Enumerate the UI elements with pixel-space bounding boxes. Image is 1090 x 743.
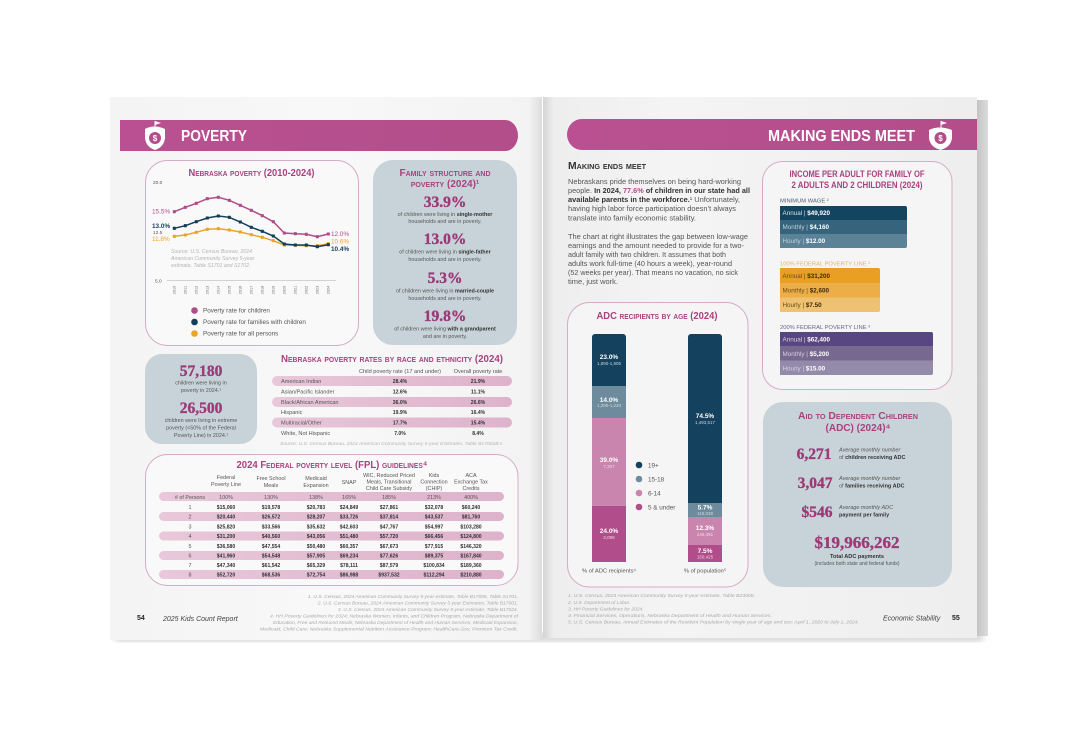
page number 54: 54 <box>137 615 145 622</box>
stat: married couple: of children were living in married-couple <box>396 288 494 294</box>
stat: payment per family <box>802 504 893 521</box>
data rows: $87,579 <box>380 563 398 569</box>
table rows <box>281 379 486 437</box>
column headers: Free School <box>256 476 286 482</box>
percent row: 130% <box>264 495 278 501</box>
table rows: 8.4% <box>472 431 484 437</box>
body text: time, just work. <box>568 277 618 286</box>
body text: adults work full-time (40 hours a week), year-round <box>568 259 732 268</box>
table column headers: Child poverty rate (17 and under) <box>359 369 441 375</box>
panel heading <box>790 169 925 191</box>
data rows: $112,294 <box>424 572 445 578</box>
minimum wage block: Hourly | $12.00 <box>782 238 826 245</box>
header title: POVERTY <box>181 128 247 145</box>
data rows: $68,536 <box>262 572 280 578</box>
data rows: $28,207 <box>307 514 325 520</box>
percent row: # of Persons <box>175 495 205 501</box>
data rows: $24,849 <box>340 505 358 511</box>
data rows: $60,240 <box>462 505 480 511</box>
200% federal poverty line block: 200% FEDERAL POVERTY LINE ³ <box>780 325 870 331</box>
column headers: Meals <box>264 483 278 489</box>
stat: married couple: households and are in poverty. <box>408 296 482 302</box>
data rows: $26,572 <box>262 514 280 520</box>
line: all persons <box>173 227 330 247</box>
data rows: $77,915 <box>425 544 443 550</box>
panel heading: 2 ADULTS AND 2 CHILDREN (2024) <box>792 180 922 191</box>
column headers: WIC, Reduced Priced <box>363 473 415 479</box>
data rows: $146,320 <box>460 544 482 550</box>
header bar: poverty <box>120 120 518 151</box>
x axis years: 2015 <box>228 286 232 294</box>
data rows: 5 <box>188 544 192 550</box>
right page footnotes: 2. U.S. Department of Labor. <box>567 600 630 606</box>
stat: single father: of children were living in single-father <box>399 250 492 256</box>
table source: Source: U.S. Census Bureau, 2024 American Community Survey 5-year Estimates, Table B17001B-I. <box>280 441 503 446</box>
table title: 2024 Federal poverty level (FPL) guidelines⁴ <box>236 460 428 471</box>
stat: children receiving: Average monthly number <box>838 448 902 454</box>
table rows: 26.6% <box>471 400 486 406</box>
table rows: 17.7% <box>393 420 408 426</box>
data rows: 6 <box>188 554 192 560</box>
100% federal poverty line block: Monthly | $2,600 <box>782 288 829 294</box>
body text: Nebraskans pride themselves on being hard-working <box>568 177 741 186</box>
section name: Economic Stability <box>883 616 941 622</box>
panel: poverty line chart <box>146 160 358 346</box>
stat: grandparent <box>394 308 496 340</box>
stat: single mother: households and are in poverty. <box>408 219 482 225</box>
left page footnotes <box>260 594 519 632</box>
table rows: Black/African American <box>281 400 339 406</box>
stat: grandparent: of children were living with a grandparent <box>394 326 496 332</box>
table rows: White, Not Hispanic <box>281 431 330 437</box>
stacked bar: population: 74.5% <box>696 413 714 420</box>
data rows: $41,960 <box>217 554 235 560</box>
table rows: American Indian <box>281 379 321 385</box>
stacked bar: population: 12.3% <box>696 525 714 532</box>
data rows: $20,440 <box>217 514 235 520</box>
percent row: 100% <box>219 495 233 501</box>
stacked bar: ADC recipients: 39.0% <box>600 457 618 464</box>
stat: 26,500: 26,500 <box>180 400 223 417</box>
data rows: $40,560 <box>262 534 280 540</box>
left page footnotes: Medicaid, Child Care; Nebraska Supplemental Nutrition Assistance Program; HealthCare.Gov, Premium Tax Credit. <box>260 626 518 632</box>
data rows: $72,754 <box>307 572 325 578</box>
data rows: $52,720 <box>217 572 235 578</box>
column headers: Kids <box>429 473 440 479</box>
stat: 26,500 <box>165 400 237 439</box>
data rows: $57,720 <box>380 534 398 540</box>
stat: 26,500: children were living in extreme <box>165 418 237 424</box>
axis labels: 12.5 <box>153 230 163 236</box>
data rows: $33,566 <box>262 524 280 530</box>
data rows: $89,375 <box>425 554 443 560</box>
data rows: 2 <box>188 514 192 520</box>
right page footnotes: 1. U.S. Census, 2024 American Community Survey 5-year estimate, Table B23008. <box>568 593 755 599</box>
column headers: Credits <box>462 486 480 492</box>
x axis years: 2014 <box>216 286 220 294</box>
stacked bar: population: 115,038 <box>697 511 713 516</box>
body text: people. In 2024, 77.6% of children in our state had all <box>568 186 750 195</box>
chart title: Nebraska poverty (2010-2024) <box>188 168 314 179</box>
stat: 26,500: Poverty Line) in 2024.¹ <box>174 433 228 439</box>
legend: Poverty rate for children <box>203 308 270 314</box>
data rows: 3 <box>188 524 192 530</box>
stat: payment per family: payment per family <box>839 512 890 518</box>
minimum wage block <box>780 198 907 248</box>
200% federal poverty line block: Hourly | $15.00 <box>782 366 826 372</box>
column headers: Connection <box>420 480 448 486</box>
stat: families receiving: 3,047 <box>798 475 833 492</box>
stat: total payments: $19,966,262 <box>814 533 900 552</box>
data rows: $78,111 <box>340 563 358 569</box>
stacked bar: ADC recipients: 1,890-1,905 <box>597 361 622 366</box>
stat: families receiving <box>798 475 905 492</box>
data rows: $60,357 <box>340 544 358 550</box>
data rows: $20,783 <box>307 505 325 511</box>
panel heading: Family structure and <box>400 168 490 179</box>
book shadow <box>115 632 983 642</box>
percent row <box>175 495 478 501</box>
200% federal poverty line block: Monthly | $5,200 <box>782 351 829 358</box>
data rows: $103,280 <box>460 524 482 530</box>
data rows: $66,456 <box>425 534 443 540</box>
100% federal poverty line block: 100% FEDERAL POVERTY LINE ³ <box>780 262 870 268</box>
stat: grandparent: 19.8% <box>424 308 466 325</box>
column headers: Meals, Transitional <box>367 480 411 486</box>
data rows: $43,056 <box>307 534 325 540</box>
column headers: Medicaid <box>305 476 327 482</box>
right page footnotes <box>567 593 859 626</box>
panel: income per adult <box>762 162 952 390</box>
stat: children receiving <box>797 446 905 463</box>
data rows: $15,060 <box>217 505 235 511</box>
panel: federal poverty level table <box>146 454 518 586</box>
report name: 2025 Kids Count Report <box>162 616 239 623</box>
x axis years: 2010 <box>172 286 176 294</box>
table rows: Hispanic <box>281 410 303 416</box>
table rows: 36.0% <box>393 400 408 406</box>
percent row: 185% <box>382 495 396 501</box>
data rows: $81,760 <box>462 514 480 520</box>
stat: 26,500: poverty (<50% of the Federal <box>166 426 236 432</box>
stat: single father: 13.0% <box>424 231 466 248</box>
left page footnotes: Education, Free and Reduced Meals; Nebraska Department of Health and Human Services, Medicaid Expansion, <box>273 620 518 626</box>
column headers: (CHIP) <box>426 486 442 492</box>
right page <box>543 97 988 638</box>
percent row: 165% <box>342 495 356 501</box>
100% federal poverty line block <box>780 262 880 312</box>
minimum wage block: MINIMUM WAGE ² <box>780 198 829 204</box>
table rows: 16.4% <box>471 410 486 416</box>
x axis years <box>172 286 330 294</box>
100% federal poverty line block: Hourly | $7.50 <box>782 302 822 309</box>
value labels: 12.0% <box>331 231 349 238</box>
value labels: 10.6% <box>331 239 349 246</box>
right page footnotes: 3. HH Poverty Guidelines for 2024. <box>568 606 644 612</box>
stat: single father: households and are in poverty. <box>408 257 482 263</box>
table: poverty rates by race <box>272 354 512 446</box>
panel heading: Aid to Dependent Children <box>798 411 918 422</box>
value labels: 15.5% <box>152 208 170 216</box>
stat: single mother: 33.9% <box>424 194 466 211</box>
x axis years: 2024 <box>326 286 330 294</box>
data rows: $167,840 <box>460 554 482 560</box>
panel heading: poverty (2024)¹ <box>411 179 480 190</box>
data rows: $54,548 <box>262 554 280 560</box>
column headers: Expansion <box>303 483 329 489</box>
stacked bar: population: 246,491 <box>697 532 714 537</box>
stat: total payments <box>814 533 900 567</box>
data rows: 1 <box>188 505 192 511</box>
data rows: $42,603 <box>340 524 358 530</box>
x axis years: 2018 <box>260 286 264 294</box>
data rows: $35,632 <box>307 524 325 530</box>
table rows: 15.4% <box>471 420 486 426</box>
left page <box>110 97 542 640</box>
page number 55: 55 <box>952 615 960 622</box>
panel: children in poverty counts <box>145 354 257 444</box>
stat: married couple: 5.3% <box>428 270 462 287</box>
x axis years: 2013 <box>206 286 210 294</box>
table rows: Asian/Pacific Islander <box>281 390 335 396</box>
data rows: $47,554 <box>262 544 280 550</box>
x axis years: 2017 <box>250 286 254 294</box>
data rows: $33,726 <box>340 514 358 520</box>
stat: single mother: of children were living in single-mother <box>398 212 493 218</box>
200% federal poverty line block: Annual | $62,400 <box>782 336 831 344</box>
panel heading <box>798 411 918 434</box>
body text: having high labor force participation doesn’t always <box>568 204 736 213</box>
data rows: $25,820 <box>217 524 235 530</box>
minimum wage block: Annual | $49,920 <box>782 210 831 217</box>
column headers: Poverty Line <box>211 482 241 488</box>
data rows: 4 <box>188 534 192 540</box>
icon: shield with dollar <box>929 121 952 150</box>
panel: aid to dependent children <box>763 402 952 587</box>
legend: 19+ <box>648 462 659 470</box>
line: children <box>173 196 330 238</box>
source note: American Community Survey 5-year <box>170 256 255 262</box>
data rows: $51,480 <box>340 534 358 540</box>
data rows: $69,234 <box>340 554 358 560</box>
value labels: 13.0% <box>152 223 170 230</box>
data rows: $31,200 <box>217 534 235 540</box>
stat: total payments: (includes both state and federal funds) <box>814 561 900 567</box>
legend: Poverty rate for families with children <box>203 319 306 326</box>
data rows: $937,532 <box>378 572 400 578</box>
header bar: making ends meet <box>567 119 977 150</box>
x axis years: 2012 <box>194 286 198 294</box>
x axis years: 2011 <box>184 286 188 294</box>
panel heading: (ADC) (2024)⁴ <box>826 423 891 434</box>
panel heading <box>400 168 490 190</box>
percent row: 400% <box>464 495 478 501</box>
table rows: 19.9% <box>393 410 408 416</box>
stat: total payments: Total ADC payments <box>830 554 884 560</box>
data rows: $27,861 <box>380 505 398 511</box>
stacked bar: ADC recipients <box>592 334 626 562</box>
right page footnotes: 5. U.S. Census Bureau, Annual Estimates of the Resident Population by single year of age and sex: April 1, 2020 to July 1, 2024. <box>568 620 859 626</box>
stacked bar: ADC recipients: 23.0% <box>600 354 618 361</box>
data rows: $124,800 <box>460 534 482 540</box>
column headers: SNAP <box>342 480 357 486</box>
table title: Nebraska poverty rates by race and ethnicity (2024) <box>281 354 503 365</box>
table column headers <box>359 369 502 375</box>
data rows: $54,997 <box>425 524 443 530</box>
stacked bar: population: 150,425 <box>697 554 714 560</box>
column headers: ACA <box>465 473 477 479</box>
table rows: 12.6% <box>393 390 408 396</box>
body text <box>568 177 750 286</box>
value labels <box>152 208 349 253</box>
data rows: 8 <box>188 572 192 578</box>
stacked bar: ADC recipients: 2,099 <box>603 535 615 540</box>
data rows: $67,673 <box>380 544 398 550</box>
x axis years: 2021 <box>294 286 298 294</box>
line: families with children <box>173 215 330 248</box>
stacked bar: population <box>688 334 722 562</box>
stat: children receiving: 6,271 <box>797 446 831 463</box>
data rows <box>188 505 482 578</box>
data rows: $37,814 <box>380 514 398 520</box>
x axis years: 2022 <box>304 286 308 294</box>
axis labels <box>153 180 336 284</box>
table rows: 21.9% <box>471 379 486 385</box>
stacked bar: ADC recipients: 24.0% <box>600 528 618 535</box>
data rows: $77,626 <box>380 554 398 560</box>
table rows: 28.4% <box>393 379 408 385</box>
section heading: Making ends meet <box>568 161 647 172</box>
table rows: Multiracial/Other <box>281 420 322 426</box>
source note: Source: U.S. Census Bureau, 2024 <box>171 249 252 255</box>
source note <box>170 249 255 269</box>
body text: available parents in the workforce. ¹ Unfortunately, <box>568 195 740 204</box>
source note: estimate, Table S1701 and S1702. <box>171 263 250 269</box>
data rows: $65,329 <box>307 563 325 569</box>
icon: shield with dollar: $ <box>938 134 943 143</box>
data rows: $47,340 <box>217 563 235 569</box>
body text: adult family with two children. It assumes that both <box>568 250 726 259</box>
200% federal poverty line block <box>780 325 933 375</box>
stat: single mother <box>398 194 493 225</box>
panel: family structure <box>373 160 517 345</box>
stacked bar: ADC recipients: 1,200-1,220 <box>597 403 622 408</box>
stacked bar: population: 5.7% <box>698 504 713 512</box>
stat: married couple <box>396 270 494 302</box>
bar captions: % of ADC recipients⁴ <box>582 568 637 574</box>
axis labels: 20.0 <box>153 180 163 186</box>
axis labels: 5.0 <box>155 278 162 284</box>
body text: translate into family economic stability. <box>568 214 696 222</box>
data rows: $86,988 <box>340 572 358 578</box>
left page footnotes: 1. U.S. Census, 2024 American Community Survey 5-year estimate, Table B17006, Table S1701. <box>308 594 518 600</box>
data rows: $36,580 <box>217 544 235 550</box>
table rows: 7.0% <box>394 431 406 437</box>
body text: The chart at right illustrates the gap between low-wage <box>568 232 748 241</box>
chart title: ADC recipients by age (2024) <box>596 311 718 322</box>
data rows: $100,834 <box>423 563 445 569</box>
right page footnotes: 4. Financial Services, Operations, Nebraska Department of Health and Human Services. <box>568 613 772 619</box>
stat: payment per family: Average monthly ADC <box>838 505 893 511</box>
value labels: 11.8% <box>152 236 170 243</box>
stat: grandparent: and are in poverty. <box>423 334 467 340</box>
stat: 57,180: children were living in <box>175 380 227 386</box>
stacked bar: population: 1,493,517 <box>695 420 716 425</box>
stat: single father <box>399 231 492 263</box>
left page footnotes: 2. U.S. Census Bureau, 2024 American Community Survey 5-year Estimates, Table B17001. <box>317 600 518 606</box>
data rows: $57,905 <box>307 554 325 560</box>
column headers: Child Care Subsidy <box>366 486 412 492</box>
data rows: $43,537 <box>425 514 443 520</box>
stat: payment per family: $546 <box>802 504 833 521</box>
bar captions: % of population⁵ <box>684 568 727 574</box>
column headers <box>211 473 488 492</box>
stat: 57,180: 57,180 <box>180 363 223 380</box>
data rows: $32,078 <box>425 505 443 511</box>
x axis years: 2019 <box>272 286 276 294</box>
stacked bar: ADC recipients: 7,307 <box>603 464 615 469</box>
bar captions <box>582 568 727 574</box>
stacked bar: population: 7.5% <box>698 548 713 555</box>
column headers: Exchange Tax <box>454 480 488 486</box>
data rows: $61,542 <box>262 563 280 569</box>
panel heading: INCOME PER ADULT FOR FAMILY OF <box>790 169 925 180</box>
data rows: 7 <box>188 563 192 569</box>
minimum wage block: Monthly | $4,160 <box>782 224 829 231</box>
legend <box>636 462 675 512</box>
stat: families receiving: Average monthly number <box>838 476 902 482</box>
header title: MAKING ENDS MEET <box>768 128 915 145</box>
legend: 15-18 <box>648 476 665 484</box>
legend: 5 & under <box>648 504 675 512</box>
stat: families receiving: of families receiving ADC <box>839 484 905 490</box>
data rows: $189,360 <box>460 563 482 569</box>
table rows: 11.1% <box>471 390 486 396</box>
stat: 57,180 <box>175 363 227 394</box>
x axis years: 2023 <box>316 286 320 294</box>
data rows: $19,578 <box>262 505 280 511</box>
icon: shield with dollar <box>145 121 165 150</box>
data rows: $210,880 <box>460 572 482 578</box>
panel: ADC recipients by age <box>568 302 748 587</box>
value labels: 10.4% <box>331 246 349 253</box>
left page footnotes: 3. U.S. Census, 2024 American Community Survey 5-year estimate, Table B17024. <box>338 607 518 613</box>
percent row: 213% <box>427 495 441 501</box>
legend: 6-14 <box>648 490 661 498</box>
body text: (52 weeks per year). That means no vacation, no sick <box>568 268 738 277</box>
stat: children receiving: of children receiving ADC <box>839 455 905 461</box>
stacked bar: ADC recipients: 14.0% <box>600 397 618 404</box>
table column headers: Overall poverty rate <box>454 369 502 375</box>
data rows: $50,480 <box>307 544 325 550</box>
100% federal poverty line block: Annual | $31,200 <box>782 273 831 280</box>
legend <box>191 307 306 338</box>
body text: earnings and the amount needed to provide for a two- <box>568 241 745 250</box>
percent row: 138% <box>309 495 323 501</box>
legend: Poverty rate for all persons <box>203 330 278 338</box>
x axis years: 2016 <box>238 286 242 294</box>
x axis years: 2020 <box>282 286 286 294</box>
left page footnotes: 4. HH Poverty Guidelines for 2024; Nebraska Women, Infants, and Children Program, Nebraska Department of <box>270 614 519 620</box>
icon: shield with dollar: $ <box>153 134 158 143</box>
data rows: $47,767 <box>380 524 398 530</box>
column headers: Federal <box>217 475 235 481</box>
stat: 57,180: poverty in 2024.¹ <box>181 388 221 394</box>
